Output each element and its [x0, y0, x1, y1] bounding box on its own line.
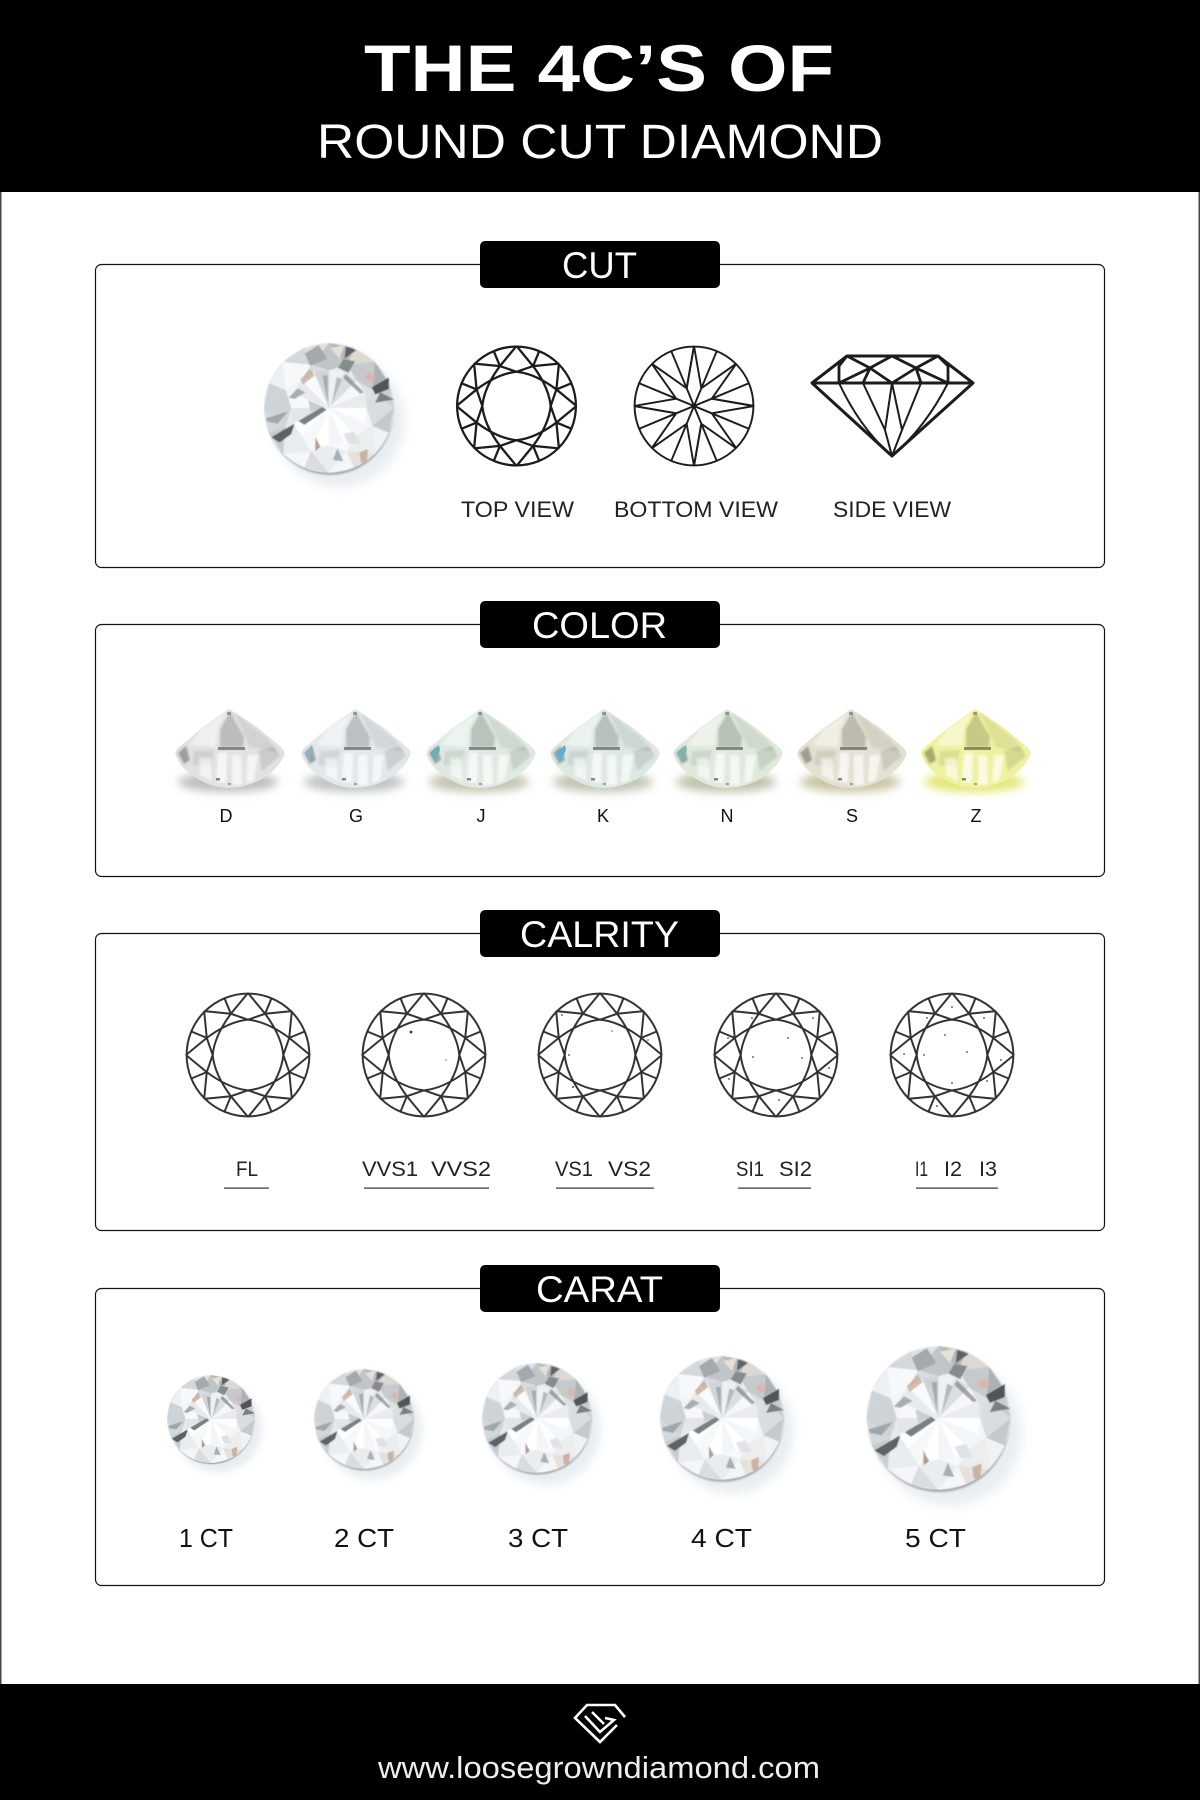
panel: carat: [96, 1265, 1104, 1586]
label: SI1 SI2: SI2: [779, 1158, 812, 1181]
label: VS1 VS2: [555, 1158, 654, 1189]
label: bottom view: BOTTOM VIEW: [614, 497, 778, 522]
color grade labels: G: [349, 806, 363, 826]
diamond: D: [175, 709, 285, 792]
diamond: 5 ct: [866, 1346, 1022, 1506]
label: I1 I2 I3: I3: [979, 1158, 997, 1181]
color grade labels: K: [597, 806, 609, 826]
heading: clarity: CALRITY: [520, 914, 679, 955]
color grade labels: Z: [970, 806, 982, 826]
heading: clarity: [480, 910, 720, 957]
carat labels: 5 CT: [905, 1523, 966, 1553]
label: side view: SIDE VIEW: [833, 497, 951, 522]
diagram: FL: [186, 993, 310, 1117]
panel: color: [96, 601, 1104, 876]
diamond: J: [426, 709, 536, 792]
heading: cut: CUT: [562, 245, 637, 286]
diagram: SI: [714, 993, 838, 1117]
diamond: 1 ct: [167, 1375, 262, 1473]
label: VVS1 VVS2: VVS1: [362, 1158, 418, 1181]
diamond: 3 ct: [482, 1363, 601, 1485]
diamond: 2 ct: [314, 1369, 422, 1480]
diagram: I: [890, 993, 1014, 1117]
diagram: VS: [538, 993, 662, 1117]
heading: color: [480, 601, 720, 648]
carat labels: 1 CT: [179, 1523, 233, 1553]
label: SI1 SI2: [736, 1158, 812, 1189]
icon: side view: [812, 356, 973, 456]
diamond: G: [301, 709, 411, 792]
color grade labels: S: [846, 806, 858, 826]
subtitle: ROUND CUT DIAMOND: [317, 116, 883, 169]
color grade labels: D: [220, 806, 232, 826]
carat labels: 3 CT: [508, 1523, 568, 1553]
icon: logo: [575, 1705, 625, 1742]
heading: color: COLOR: [532, 605, 667, 646]
color grade labels: N: [720, 806, 734, 826]
diamond: K: [550, 709, 660, 792]
label: I1 I2 I3: [915, 1158, 998, 1189]
photo: round diamond: [264, 343, 404, 487]
panel: clarity: [96, 910, 1104, 1230]
color grade labels: J: [476, 806, 486, 826]
label: FL: FL: [236, 1158, 258, 1181]
icon: top view: [456, 346, 576, 466]
heading: carat: CARAT: [536, 1269, 663, 1310]
label: I1 I2 I3: I2: [944, 1158, 962, 1181]
diamond: N: [673, 709, 783, 792]
footer banner: [0, 1684, 1200, 1800]
diamond: 4 ct: [660, 1356, 794, 1494]
label: VS1 VS2: VS2: [608, 1158, 651, 1181]
label: FL: [224, 1158, 269, 1189]
diamond: Z: [921, 709, 1031, 792]
icon: bottom view: [634, 346, 754, 466]
diagram: VVS: [362, 993, 486, 1117]
heading: carat: [480, 1265, 720, 1312]
carat labels: [179, 1523, 966, 1553]
header banner: [0, 0, 1200, 192]
panel: cut: [96, 241, 1104, 568]
label: VS1 VS2: VS1: [555, 1158, 593, 1181]
label: top view: TOP VIEW: [461, 497, 574, 522]
label: VVS1 VVS2: VVS2: [431, 1158, 491, 1181]
diamond: S: [797, 709, 907, 792]
color grade labels: [220, 806, 982, 826]
label: I1 I2 I3: I1: [915, 1158, 928, 1181]
label: VVS1 VVS2: [362, 1158, 491, 1189]
label: SI1 SI2: SI1: [736, 1158, 764, 1181]
carat labels: 2 CT: [334, 1523, 394, 1553]
title: THE 4C’S OF: [364, 31, 834, 105]
carat labels: 4 CT: [691, 1523, 752, 1553]
heading: cut: [480, 241, 720, 288]
website url: www.loosegrowndiamond.com: [377, 1750, 820, 1785]
